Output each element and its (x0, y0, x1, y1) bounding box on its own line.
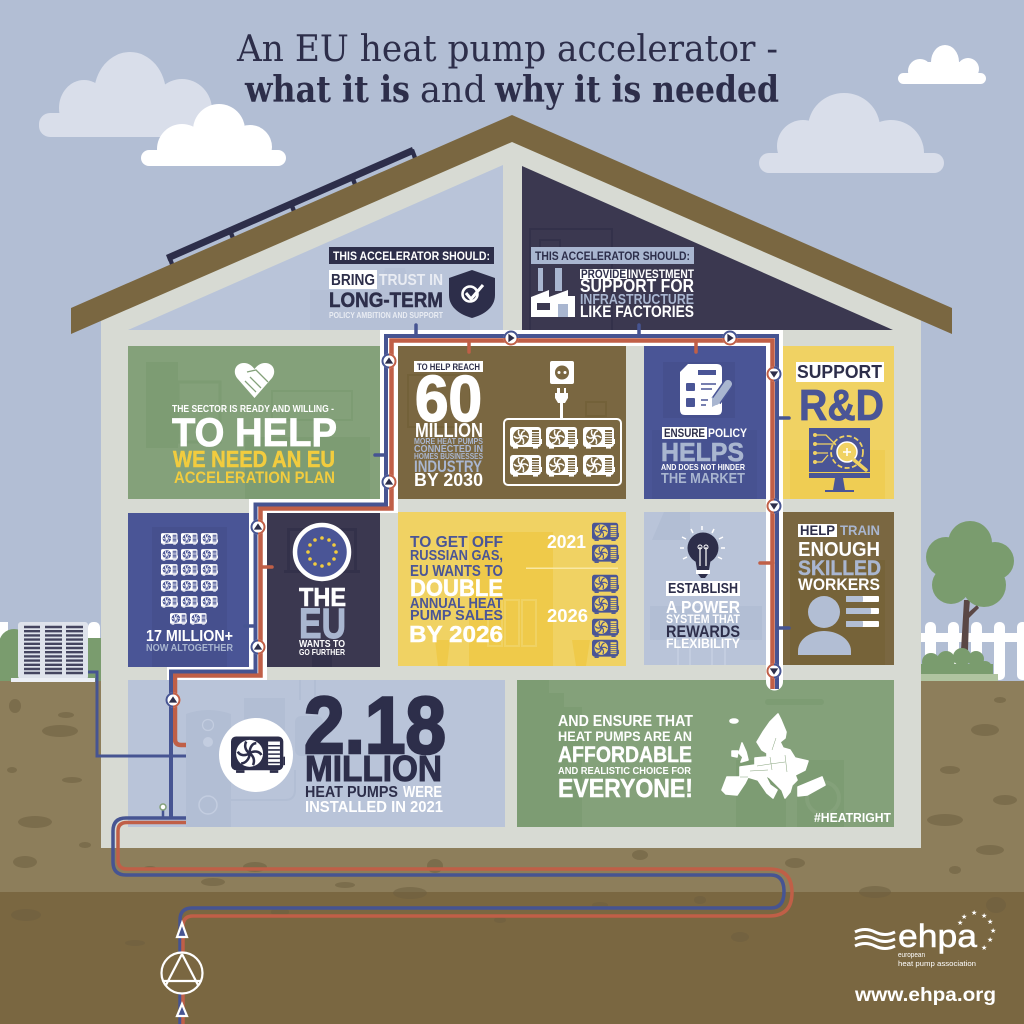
text: 17 MILLION+ (146, 628, 233, 645)
icon: shield (449, 270, 495, 318)
hashtag: #HEATRIGHT (814, 810, 891, 825)
heading: LIKE FACTORIES (580, 302, 694, 321)
text: INSTALLED IN 2021 (305, 799, 443, 816)
panel: 17 million (128, 513, 249, 667)
text: EVERYONE! (558, 773, 693, 803)
text: TRAIN (840, 522, 880, 538)
text: THE (299, 582, 346, 612)
icon: heat pump badge (219, 718, 293, 792)
icon: light bulb (680, 526, 725, 578)
title: An EU heat pump accelerator - (236, 29, 778, 70)
bush (921, 648, 998, 681)
text: TO HELP REACH (417, 362, 480, 373)
tree (926, 521, 1014, 650)
cold pipe (171, 336, 777, 817)
cloud: small white left (141, 104, 286, 166)
text: ANNUAL HEAT (410, 596, 503, 612)
text: NOW ALTOGETHER (146, 642, 233, 654)
text (661, 426, 747, 487)
text: TO HELP (172, 411, 337, 455)
panel: trust (128, 165, 503, 330)
text (796, 361, 884, 430)
outdoor pipe (88, 672, 186, 756)
logo: ehpa: ★ (971, 909, 977, 917)
hedge: left (0, 629, 101, 681)
panel: 60 million (398, 346, 626, 499)
text: AND DOES NOT HINDER (661, 462, 745, 472)
pipe insulation outline (167, 330, 783, 691)
panel: investment (522, 166, 893, 330)
ground loop hot (118, 822, 792, 1024)
ground loop cold (113, 818, 784, 1024)
fence: left (0, 622, 100, 680)
logo: ehpa (855, 909, 996, 968)
text (172, 404, 337, 487)
icon: heat pump grid (161, 533, 218, 625)
logo: ehpa: ★ (990, 927, 996, 935)
heading: LONG-TERM (329, 289, 443, 312)
text: MORE HEAT PUMPS (414, 437, 483, 446)
text: WE NEED AN EU (173, 446, 335, 472)
text: 60 (415, 362, 482, 435)
text: HEAT PUMPS ARE AN (558, 729, 692, 744)
panel: double sales (398, 512, 626, 666)
text: THE SECTOR IS READY AND WILLING - (172, 404, 334, 415)
roof (71, 115, 952, 334)
text: DOUBLE (410, 575, 503, 602)
text: ENOUGH (798, 539, 880, 561)
text (666, 581, 741, 651)
text: 2.18 (304, 681, 446, 771)
cloud: large right (759, 93, 944, 173)
text: EU (299, 600, 346, 648)
logo waves (855, 930, 895, 948)
icon: handshake heart (235, 363, 274, 398)
text: GO FURTHER (299, 647, 345, 657)
solar panel (166, 147, 417, 268)
ground lower layer (0, 892, 1024, 1024)
tag: THIS ACCELERATOR SHOULD: (535, 249, 690, 263)
panel: skilled workers (783, 512, 894, 665)
title: what it is (244, 69, 410, 111)
text: SUPPORT (797, 361, 883, 382)
text: INDUSTRY (414, 457, 483, 476)
chart: 2021 vs 2026: 2021 (547, 532, 586, 552)
text: MILLION (305, 748, 442, 789)
text: ACCELERATION PLAN (174, 468, 335, 487)
website: www.ehpa.org (854, 985, 996, 1006)
chart: 2021 vs 2026: 2026 (547, 606, 588, 626)
text: EU WANTS TO (410, 563, 503, 580)
text: WANTS TO (299, 638, 345, 650)
fence: right (921, 622, 1024, 680)
text: CONNECTED IN (414, 444, 483, 455)
text (558, 713, 693, 803)
text: PUMP SALES (410, 608, 503, 624)
cloud: small white right (898, 45, 986, 84)
text: ESTABLISH (668, 581, 738, 597)
text: RUSSIAN GAS, (410, 547, 503, 564)
text (299, 582, 346, 657)
icon: worker profile (798, 596, 879, 655)
house wall (101, 140, 921, 848)
text: FLEXIBILITY (666, 635, 741, 651)
text: TO GET OFF (410, 534, 503, 551)
panel: R&D (783, 346, 894, 499)
text: SKILLED (798, 556, 881, 580)
heading: SUPPORT FOR (580, 275, 694, 296)
logo: ehpa: ★ (961, 913, 967, 921)
text: REWARDS (666, 622, 740, 641)
text: SYSTEM THAT (666, 614, 740, 626)
heading (329, 270, 443, 320)
text: BY 2030 (414, 470, 483, 490)
text (146, 628, 233, 654)
text: WORKERS (798, 575, 880, 594)
branch stubs (245, 325, 789, 628)
icon: checklist (680, 364, 728, 415)
icon: EU flag circle (295, 525, 349, 579)
logo: ehpa: ehpa (898, 918, 977, 954)
text (798, 522, 881, 594)
valve (160, 804, 166, 817)
outdoor unit (11, 622, 95, 682)
heading (580, 269, 694, 321)
panel: power system (644, 512, 766, 665)
text: HELP (800, 522, 835, 538)
cloud: large left (39, 52, 214, 141)
text: POLICY (708, 426, 747, 440)
icon: socket and plug (550, 361, 574, 418)
title (236, 29, 779, 111)
hot pipe (175, 340, 772, 745)
text: R&D (799, 381, 884, 430)
panel: policy (644, 346, 766, 499)
logo: ehpa: ★ (981, 912, 987, 920)
text: BY 2026 (409, 621, 503, 647)
text: HEAT PUMPS (305, 784, 398, 801)
panel: ready to help (128, 346, 380, 499)
text: A POWER (666, 597, 740, 617)
text: HOMES BUSINESSES (414, 452, 483, 461)
ground upper layer (0, 681, 1024, 893)
text (409, 534, 503, 647)
title: why it is needed (494, 69, 779, 111)
text: HELPS (661, 437, 744, 467)
panel: affordable (517, 680, 894, 827)
text: ENSURE (664, 426, 705, 440)
panel: 2.18 million (128, 680, 505, 827)
heading: INVESTMENT (628, 269, 694, 281)
panel: the EU (267, 513, 380, 667)
icon: computer research (809, 428, 870, 492)
heading: BRING (331, 272, 375, 289)
icon: ground pump (162, 923, 202, 1016)
logo: ehpa: heat pump association (898, 959, 976, 968)
logo: ehpa: european (898, 950, 925, 959)
heading: POLICY AMBITION AND SUPPORT (329, 311, 443, 320)
logo: ehpa: ★ (981, 944, 987, 952)
tag: THIS ACCELERATOR SHOULD: (333, 249, 490, 263)
text: MILLION (415, 420, 483, 442)
title: and (420, 70, 486, 111)
icon: heat pump array (504, 419, 621, 485)
heading: TRUST IN (379, 272, 443, 289)
logo: ehpa: ★ (987, 918, 993, 926)
text (304, 681, 446, 816)
text: THE MARKET (661, 471, 745, 487)
logo: ehpa: ★ (957, 919, 963, 927)
chart: 2021 vs 2026 (526, 523, 619, 658)
text: AFFORDABLE (558, 742, 692, 767)
heading: PROVIDE (581, 269, 626, 281)
soil speckles (7, 697, 1017, 946)
flow markers (166, 330, 782, 708)
icon: map of Europe (722, 714, 825, 798)
text: WERE (403, 784, 442, 801)
heading: INFRASTRUCTURE (580, 291, 694, 308)
text: AND REALISTIC CHOICE FOR (558, 765, 691, 777)
text (414, 361, 483, 490)
logo: ehpa: ★ (987, 936, 993, 944)
icon: factory (531, 268, 575, 317)
pipe system (88, 325, 792, 1024)
text: AND ENSURE THAT (558, 713, 693, 730)
